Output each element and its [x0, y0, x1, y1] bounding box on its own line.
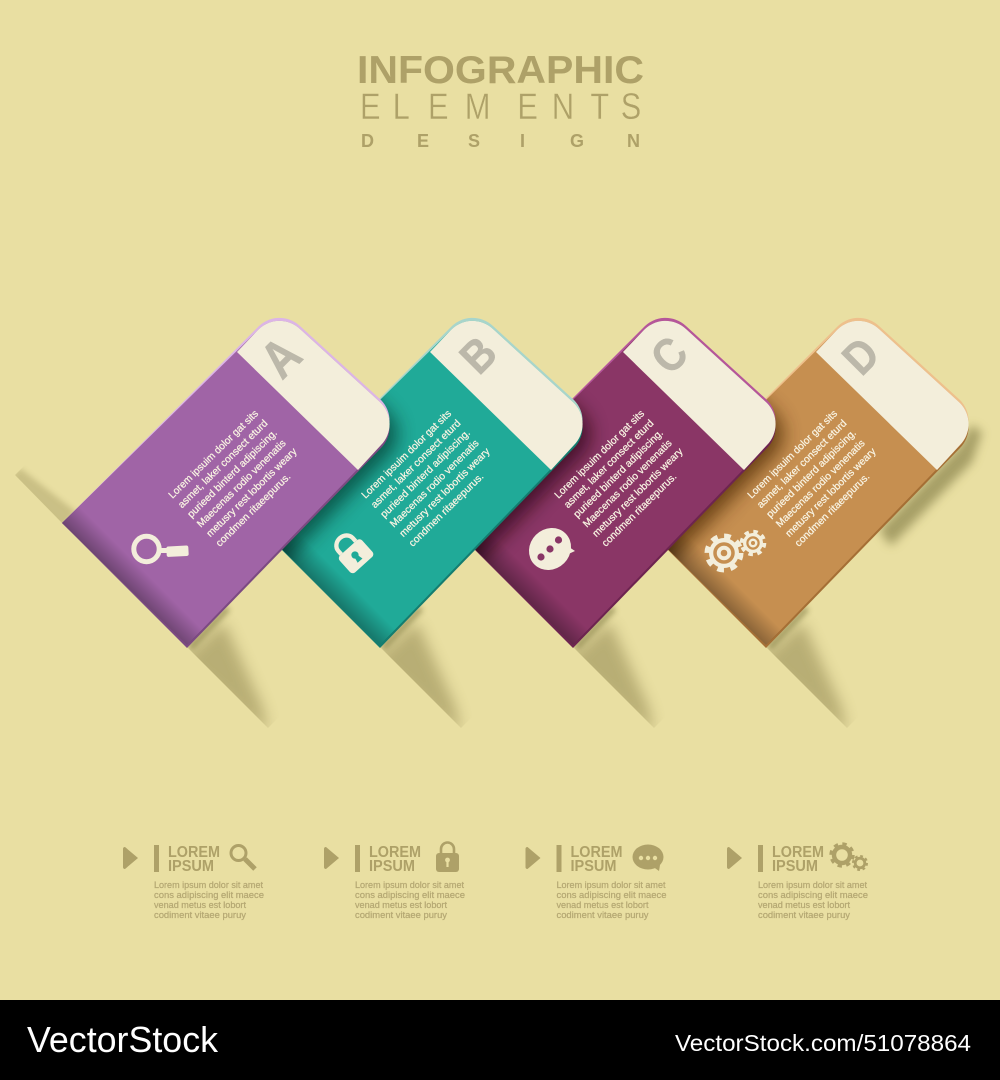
text A: Lorem ipsuim dolor gat sits — [167, 408, 261, 501]
legend item 1 — [123, 844, 264, 920]
rim shade A — [62, 324, 390, 648]
text B: Maecenas rodio venenatis — [388, 438, 482, 530]
heading 4: LOREM — [772, 844, 824, 861]
rim shade D — [641, 324, 969, 648]
text C: asmet, laker consect eturd — [562, 418, 657, 511]
arrow 2 — [324, 847, 339, 869]
text A: purieed binterd adipiscing. — [186, 428, 280, 520]
tab A — [237, 321, 390, 470]
text A — [167, 407, 310, 549]
description 2: venad metus est lobort — [355, 899, 447, 910]
letter C: C — [641, 327, 698, 384]
bottom edge shade D — [641, 505, 784, 645]
heading 2: IPSUM — [369, 858, 415, 875]
card A: purple — [62, 318, 390, 735]
text C — [553, 407, 696, 549]
shade from card A — [282, 394, 408, 563]
text C: condmen ritaeepurus. — [600, 471, 679, 549]
text D: asmet, laker consect eturd — [755, 418, 850, 511]
description 3 — [556, 879, 666, 920]
description 2: codiment vitaee puruy — [355, 909, 447, 920]
description 1: venad metus est lobort — [154, 899, 246, 910]
slit shadow B — [373, 608, 461, 735]
slit shadow C — [566, 608, 654, 735]
icon: padlock — [329, 528, 375, 575]
description 2: cons adipiscing elit maece — [355, 889, 465, 900]
slit shadow D — [759, 608, 847, 735]
icon: small padlock — [436, 842, 459, 872]
text D — [746, 407, 889, 549]
arrow 3 — [526, 847, 540, 869]
footer logo text: VectorStock — [27, 1019, 219, 1060]
legend item 2 — [324, 842, 465, 920]
legend item 4 — [727, 844, 868, 920]
description 1: cons adipiscing elit maece — [154, 889, 264, 900]
text C: Maecenas rodio venenatis — [581, 438, 675, 530]
description 4 — [758, 879, 868, 920]
description 4: venad metus est lobort — [758, 899, 850, 910]
rim highlight C — [448, 318, 776, 642]
text B: purieed binterd adipiscing. — [379, 428, 473, 520]
icon: small magnifier — [231, 846, 255, 869]
heading 2: LOREM — [369, 844, 421, 861]
title: DESIGN — [361, 131, 640, 151]
text C: purieed binterd adipiscing. — [572, 428, 666, 520]
description 4: cons adipiscing elit maece — [758, 889, 868, 900]
tab D — [816, 321, 969, 470]
card B: teal — [282, 318, 583, 728]
text D: purieed binterd adipiscing. — [765, 428, 859, 520]
heading 3: IPSUM — [570, 858, 616, 875]
text A: Maecenas rodio venenatis — [195, 438, 289, 530]
bottom edge shade B — [255, 505, 398, 645]
body D — [641, 321, 969, 645]
text B: asmet, laker consect eturd — [369, 418, 464, 511]
card C: maroon — [475, 318, 776, 728]
icon: speech bubble — [520, 519, 580, 579]
description 1: codiment vitaee puruy — [154, 909, 246, 920]
letter B: B — [450, 327, 507, 384]
cast shadow of card D — [879, 425, 982, 546]
description 3: venad metus est lobort — [556, 899, 649, 910]
bottom edge shade A — [62, 505, 205, 645]
title — [357, 49, 644, 151]
text A: metusry rest lobortis weary — [205, 446, 300, 540]
icon: magnifier — [134, 536, 189, 562]
text D: Lorem ipsuim dolor gat sits — [746, 408, 840, 501]
heading 3 — [570, 844, 622, 875]
text B: condmen ritaeepurus. — [407, 471, 486, 549]
left slit shadow — [15, 468, 75, 523]
heading 4 — [772, 844, 824, 875]
rim highlight B — [255, 318, 583, 642]
footer url: VectorStock.com/51078864 — [675, 1030, 971, 1056]
body B — [255, 321, 583, 645]
title: INFOGRAPHIC — [357, 49, 644, 92]
tab B — [430, 321, 583, 470]
divider bar 2 — [355, 845, 360, 872]
description 1: Lorem ipsum dolor sit amet — [154, 879, 263, 890]
bottom edge shade C — [448, 505, 591, 645]
divider bar 3 — [556, 845, 562, 872]
text D: condmen ritaeepurus. — [793, 471, 872, 549]
text D: metusry rest lobortis weary — [784, 446, 879, 540]
divider bar 1 — [154, 845, 159, 872]
description 1 — [154, 879, 264, 920]
letter A: A — [249, 326, 313, 389]
rim highlight D — [641, 318, 969, 642]
text B: Lorem ipsuim dolor gat sits — [360, 408, 454, 501]
body C — [448, 321, 776, 645]
footer band — [0, 1000, 1000, 1080]
arrow 1 — [123, 847, 138, 869]
description 3: cons adipiscing elit maece — [556, 889, 666, 900]
icon: small gears — [831, 844, 867, 870]
heading 1 — [168, 844, 220, 875]
heading 2 — [369, 844, 421, 875]
icon: small speech bubble — [632, 844, 664, 871]
description 2 — [355, 879, 465, 920]
letter D: D — [833, 328, 890, 385]
text B: metusry rest lobortis weary — [398, 446, 493, 540]
rim highlight A — [62, 318, 390, 642]
text D: Maecenas rodio venenatis — [774, 438, 868, 530]
title: ELEMENTS — [360, 86, 641, 128]
shade from card C — [668, 394, 794, 564]
rim shade C — [448, 324, 776, 648]
arrow 4 — [727, 847, 742, 869]
description 3: codiment vitaee puruy — [556, 909, 649, 920]
text A: condmen ritaeepurus. — [214, 471, 293, 549]
heading 3: LOREM — [570, 844, 622, 861]
shade from card B — [476, 394, 602, 562]
slit shadow A — [180, 608, 268, 735]
rim shade B — [255, 324, 583, 648]
icon: gears — [707, 532, 764, 570]
heading 1: IPSUM — [168, 858, 214, 875]
description 2: Lorem ipsum dolor sit amet — [355, 879, 464, 890]
heading 4: IPSUM — [772, 858, 818, 875]
text B — [360, 407, 503, 549]
divider bar 4 — [758, 845, 763, 872]
description 4: Lorem ipsum dolor sit amet — [758, 879, 867, 890]
text A: asmet, laker consect eturd — [176, 418, 271, 511]
description 4: codiment vitaee puruy — [758, 909, 850, 920]
legend item 3 — [526, 844, 666, 920]
body A — [62, 321, 390, 645]
text C: metusry rest lobortis weary — [591, 446, 686, 540]
tab C — [623, 321, 776, 470]
heading 1: LOREM — [168, 844, 220, 861]
text C: Lorem ipsuim dolor gat sits — [553, 408, 647, 501]
description 3: Lorem ipsum dolor sit amet — [556, 879, 666, 890]
card D: brown — [456, 318, 982, 735]
